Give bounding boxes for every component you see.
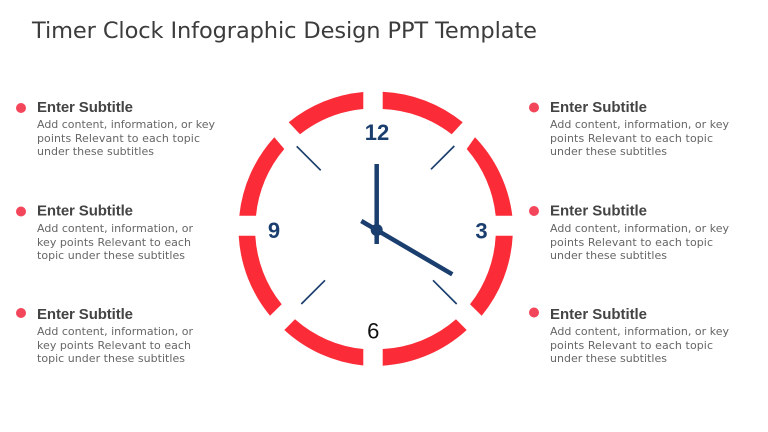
body text: points Relevant to each topic [550,236,713,249]
bullet [16,103,26,113]
body text: points Relevant to each topic [37,132,200,145]
body text: under these subtitles [550,145,667,158]
body text: topic under these subtitles [37,352,185,365]
bullet [16,206,26,216]
bullet [529,206,539,216]
bullet [16,308,26,318]
clock [239,92,513,366]
panel: right item 3 [529,306,729,365]
bullet [529,102,539,112]
body text: Add content, information, or key [550,118,729,131]
clock numbers: 3 [475,218,488,244]
subtitle: Enter Subtitle [37,202,133,220]
body text [550,222,729,262]
subtitle: Enter Subtitle [37,306,133,323]
body text: under these subtitles [550,249,667,262]
body text: key points Relevant to each [37,339,191,352]
body text [37,222,193,262]
panel: left item 1 [16,99,215,158]
subtitle: Enter Subtitle [37,99,133,116]
body text: Add content, information, or [37,325,193,338]
body text [550,325,729,365]
body text: under these subtitles [37,145,154,158]
body text: Add content, information, or [37,222,193,235]
panel: right item 2 [529,202,729,262]
clock numbers: 6 [367,318,379,344]
bullet [529,308,539,318]
panel: right item 1 [529,99,729,158]
clock numbers: 12 [365,120,389,145]
body text [37,325,193,365]
tick marks [297,146,457,304]
body text: Add content, information, or key [550,325,729,338]
body text: points Relevant to each topic [550,132,713,145]
body text: key points Relevant to each [37,236,191,249]
body text: Add content, information, or key [550,222,729,235]
subtitle: Enter Subtitle [550,202,647,220]
clock numbers: 9 [268,218,280,243]
body text [550,118,729,158]
body text: topic under these subtitles [37,249,185,262]
clock hands [361,164,452,274]
body text: under these subtitles [550,352,667,365]
clock ring segments [239,92,513,366]
title: Timer Clock Infographic Design PPT Template [31,18,537,44]
subtitle: Enter Subtitle [550,99,647,116]
panel: left item 3 [16,306,193,365]
body text: Add content, information, or key [37,118,215,131]
body text [37,118,215,158]
body text: points Relevant to each topic [550,339,713,352]
subtitle: Enter Subtitle [550,306,647,323]
panel: left item 2 [16,202,193,262]
clock numbers [268,120,488,344]
